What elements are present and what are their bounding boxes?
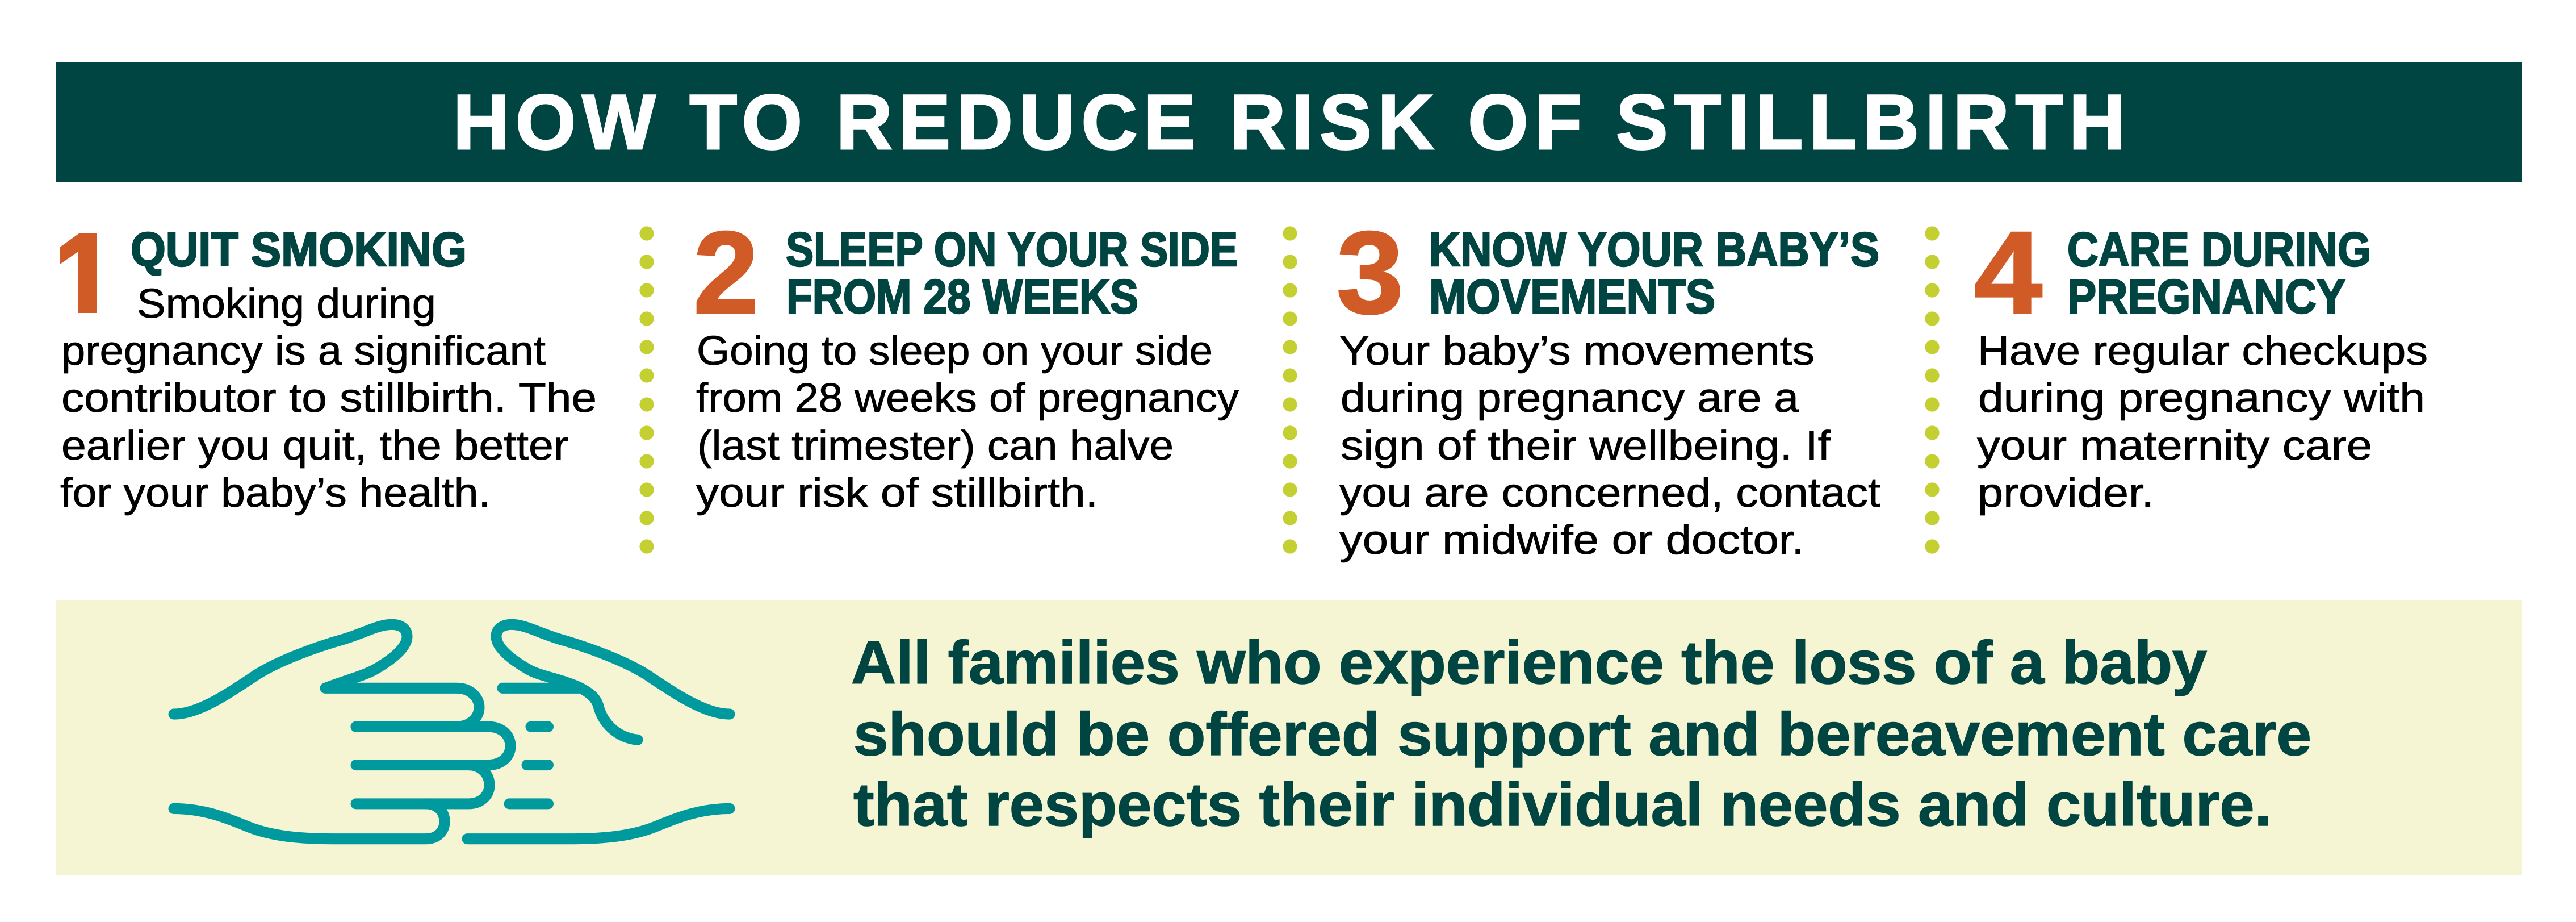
panel: support callout [56, 600, 2522, 875]
body text: contributor to stillbirth. The [61, 376, 597, 421]
body text: Smoking during [137, 281, 436, 327]
panel: step 1 quit smoking [60, 232, 595, 516]
body text: your midwife or doctor. [1339, 518, 1804, 563]
body text [1339, 328, 1880, 563]
dotted divider 3 [1925, 226, 1940, 554]
heading: quit smoking: QUIT SMOKING [131, 223, 467, 276]
body text: Have regular checkups [1978, 328, 2428, 374]
icon: two hands [174, 624, 730, 839]
body text: during pregnancy are a [1341, 376, 1799, 421]
title banner [56, 62, 2522, 182]
numeral 3: 3 [1337, 207, 1404, 338]
body text [1977, 328, 2428, 516]
heading: know your baby's movements: MOVEMENTS [1429, 270, 1715, 323]
callout text: that respects their individual needs and culture. [853, 770, 2272, 838]
dotted divider 2 [1283, 226, 1297, 554]
numeral 1: 1 [50, 203, 119, 359]
panel: step 3 know your baby's movements [1337, 207, 1880, 563]
dotted divider 1 [639, 226, 654, 554]
heading: care during pregnancy: PREGNANCY [2067, 270, 2345, 323]
callout text: All families who experience the loss of a baby [851, 628, 2207, 696]
body text [696, 328, 1239, 516]
callout text: should be offered support and bereavement care [853, 700, 2311, 768]
body text: during pregnancy with [1978, 376, 2425, 421]
body text: Going to sleep on your side [697, 328, 1213, 374]
heading: know your baby's movements [1429, 223, 1879, 323]
body text: Your baby’s movements [1339, 328, 1815, 374]
body text: pregnancy is a significant [61, 328, 546, 374]
heading: care during pregnancy: CARE DURING [2067, 223, 2371, 276]
body text: earlier you quit, the better [61, 423, 568, 469]
heading: sleep on your side: FROM 28 WEEKS [786, 270, 1138, 323]
heading: care during pregnancy [2067, 223, 2371, 323]
heading: know your baby's movements: KNOW YOUR BABY’S [1429, 223, 1879, 276]
callout text [851, 628, 2311, 838]
panel: step 2 sleep on your side [693, 207, 1239, 516]
body text: (last trimester) can halve [697, 423, 1174, 469]
body text: your maternity care [1977, 423, 2372, 469]
numeral 2: 2 [693, 207, 759, 338]
panel: step 4 care during pregnancy [1974, 207, 2428, 516]
body text: sign of their wellbeing. If [1341, 423, 1831, 469]
heading: sleep on your side [786, 223, 1238, 323]
body text: from 28 weeks of pregnancy [696, 376, 1239, 421]
heading: sleep on your side: SLEEP ON YOUR SIDE [786, 223, 1238, 276]
title: HOW TO REDUCE RISK OF STILLBIRTH [453, 79, 2125, 166]
body text: you are concerned, contact [1339, 470, 1880, 516]
numeral 4: 4 [1974, 207, 2042, 338]
body text [60, 281, 597, 516]
body text: for your baby’s health. [60, 470, 491, 516]
body text: your risk of stillbirth. [696, 470, 1098, 516]
body text: provider. [1978, 470, 2154, 516]
